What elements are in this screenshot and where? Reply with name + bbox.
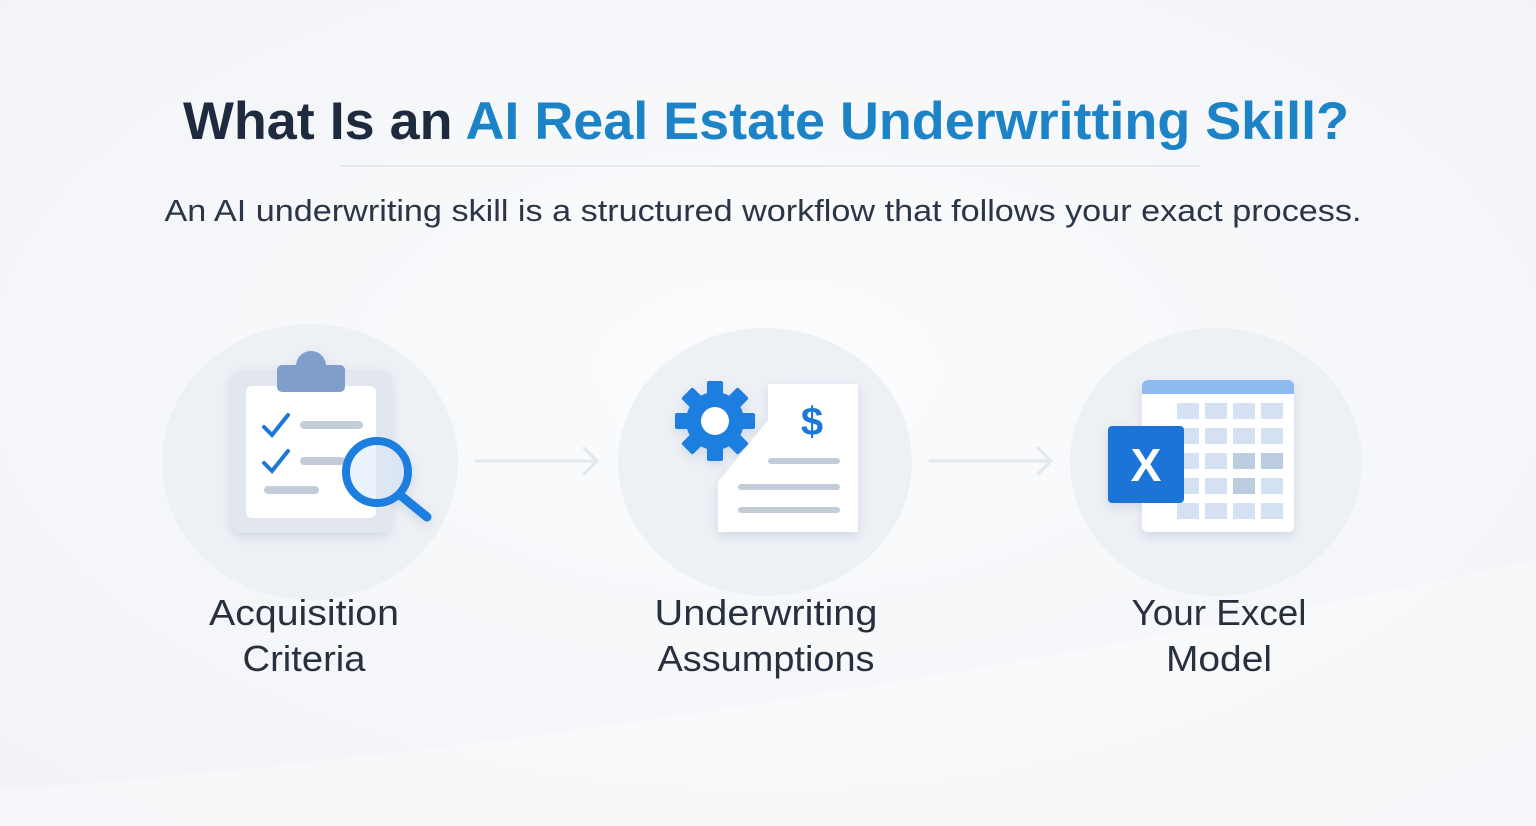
step 1: acquisition criteria	[162, 324, 458, 679]
label: Your Excel	[1132, 592, 1306, 633]
icon: clipboard with magnifier	[231, 351, 427, 533]
title: What Is an AI Real Estate Underwritting Skill?	[183, 92, 1349, 151]
step 3: excel model	[1070, 328, 1362, 679]
step 3: excel model: Model	[1166, 638, 1272, 679]
icon: spreadsheet with excel logo	[1108, 380, 1294, 532]
label: Acquisition	[209, 592, 399, 633]
arrow 1	[476, 448, 597, 474]
step 2: underwriting assumptions: Assumptions	[658, 638, 874, 679]
icon: spreadsheet with excel logo: X	[1131, 439, 1162, 491]
icon: gear and document	[658, 364, 858, 532]
step 1: acquisition criteria: Criteria	[242, 638, 367, 679]
label: Underwriting	[654, 592, 878, 633]
step 2: underwriting assumptions	[618, 328, 912, 679]
icon: gear and document: $	[801, 400, 823, 444]
arrow 2	[930, 448, 1051, 474]
subtitle: An AI underwriting skill is a structured workflow that follows your exact process.	[164, 193, 1362, 228]
